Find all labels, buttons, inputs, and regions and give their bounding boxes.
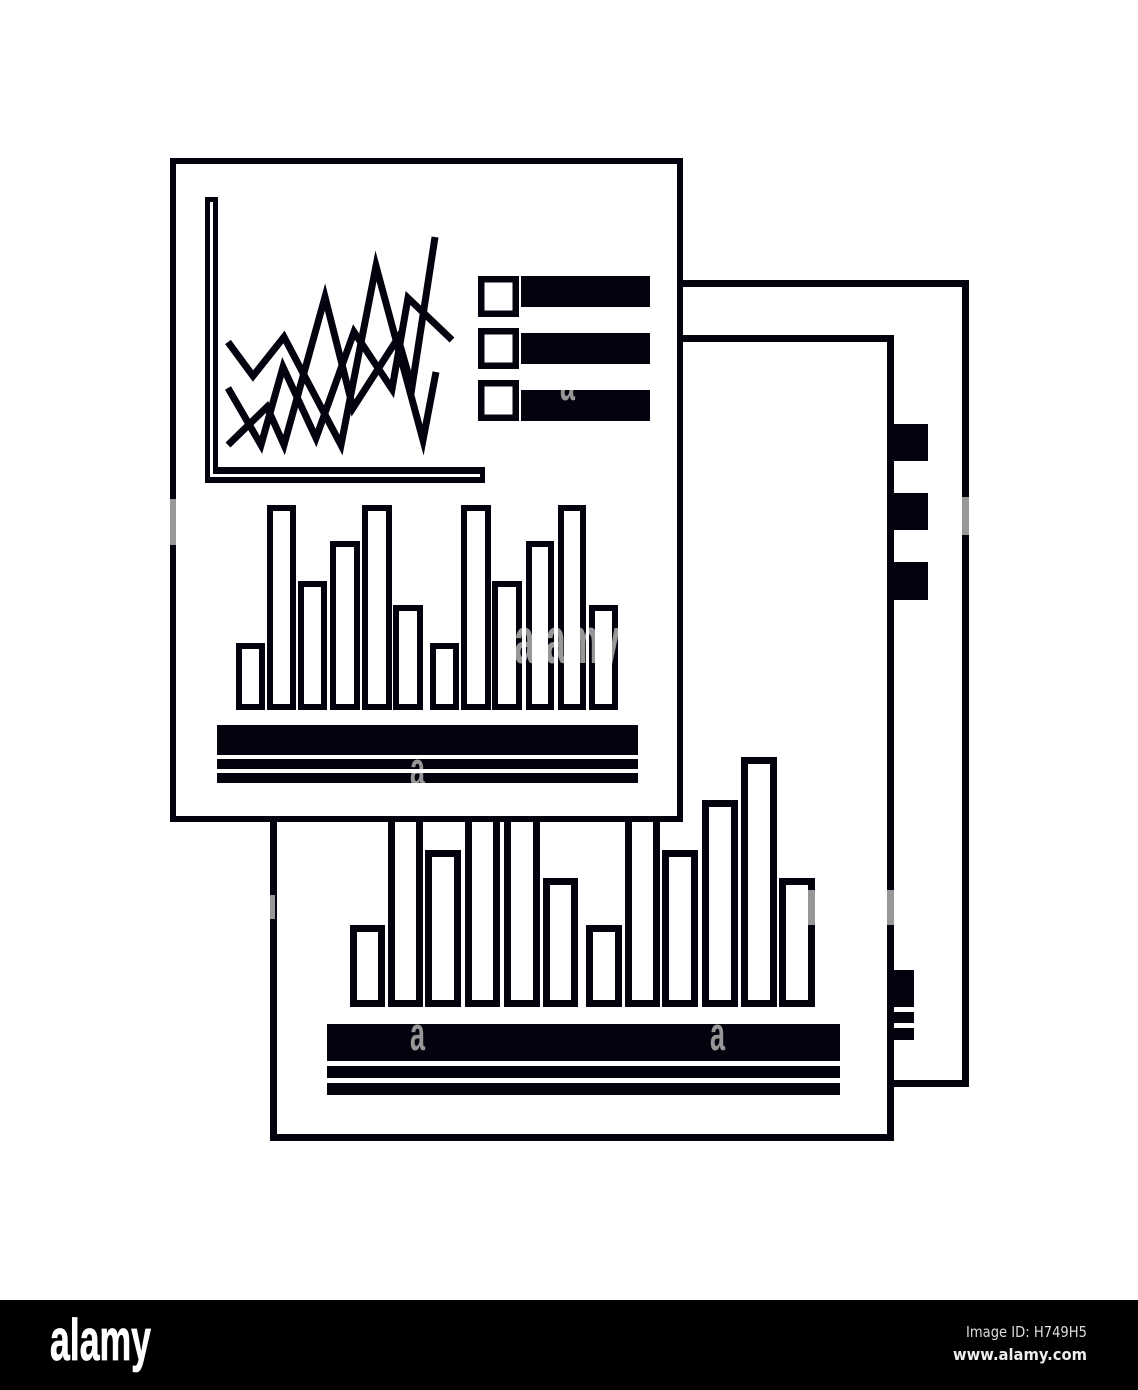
lower text bars	[327, 1024, 840, 1095]
legend labels	[521, 276, 650, 421]
legend swatches	[481, 279, 516, 418]
line chart	[228, 237, 452, 445]
back sheet	[681, 284, 966, 1084]
side tabs on back sheet	[890, 424, 928, 1040]
upper bar chart	[239, 508, 615, 707]
watermark: a	[560, 357, 575, 410]
legend	[481, 276, 650, 421]
watermark: a	[410, 742, 425, 795]
alamy logo: alamy	[50, 1308, 151, 1373]
image id: Image ID: H749H5	[966, 1323, 1087, 1341]
watermark: a	[410, 1007, 425, 1060]
watermark	[170, 357, 969, 1060]
front sheet	[173, 161, 680, 819]
website: www.alamy.com	[953, 1345, 1087, 1364]
middle sheet	[274, 338, 890, 1138]
chart axes	[205, 197, 485, 483]
footer bar	[0, 1300, 1138, 1390]
watermark: alamy	[514, 603, 620, 677]
upper text bars	[217, 725, 638, 783]
lower bar chart	[354, 760, 812, 1004]
watermark: a	[710, 1007, 725, 1060]
